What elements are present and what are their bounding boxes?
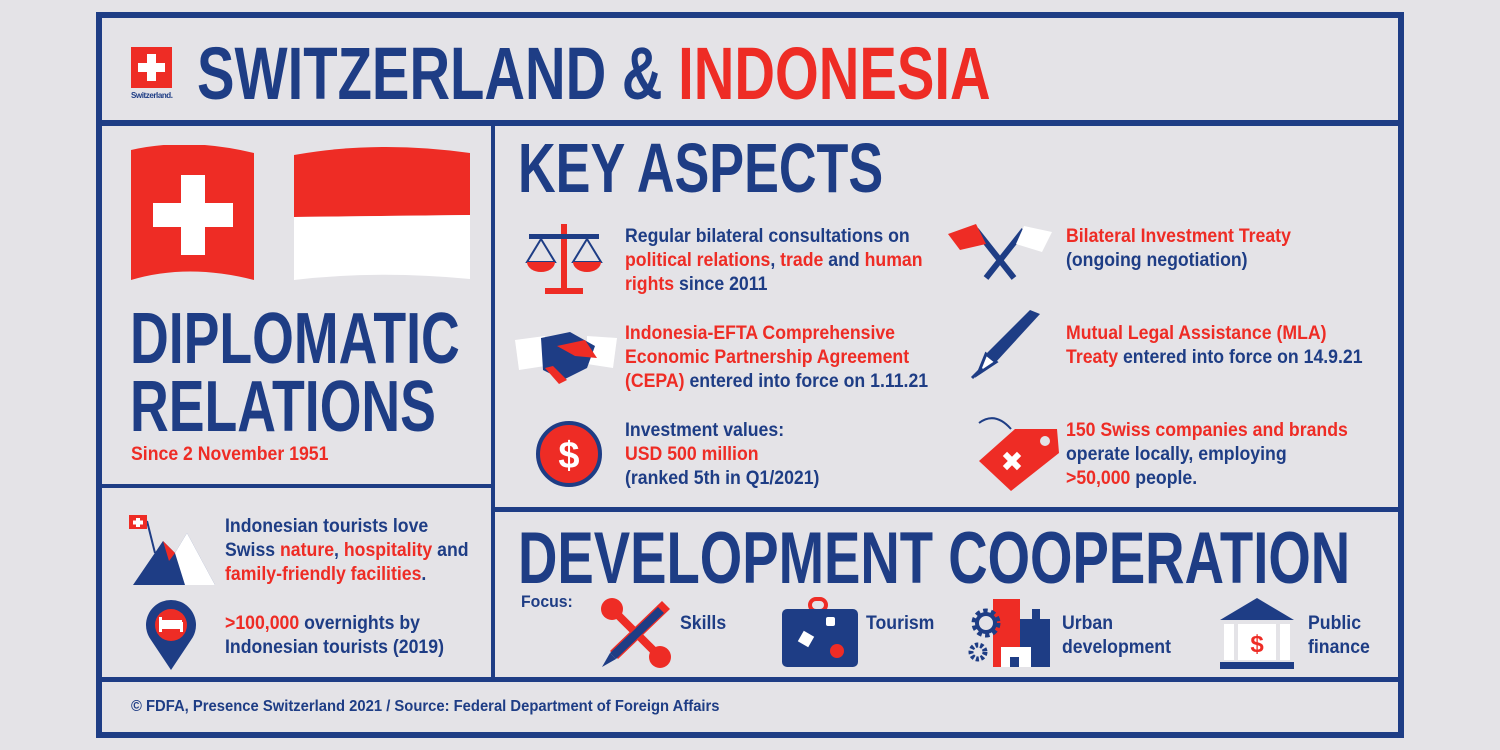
icon: price tag (978, 417, 1059, 491)
text: CEPA: Economic Partnership Agreement (625, 347, 909, 368)
text: companies (1066, 420, 1348, 489)
text: CEPA (625, 323, 928, 392)
text: MLA (1066, 323, 1363, 368)
heading: diplomatic relations (130, 299, 460, 447)
panel: tourism (129, 515, 215, 670)
text: CEPA: Indonesia-EFTA Comprehensive (625, 323, 895, 344)
text: consultations: rights since 2011 (625, 274, 767, 295)
icon: urban development (968, 599, 1050, 667)
icon: crossed flags (948, 224, 1052, 280)
panel: flags and diplomatic relations (131, 145, 470, 280)
text: skills: Skills (680, 613, 726, 634)
text: public finance: Public (1308, 613, 1361, 634)
heading: diplomatic relations: DIPLOMATIC (130, 299, 460, 379)
icon: flags (131, 145, 470, 280)
heading: key aspects: KEY ASPECTS (518, 129, 883, 207)
icon: bank: $ (1250, 631, 1264, 658)
text: tourists love: Swiss nature, hospitality and (225, 540, 469, 561)
text: investment: (ranked 5th in Q1/2021) (625, 468, 819, 489)
icon: handshake (515, 332, 617, 384)
text: consultations: political relations, trade and human (625, 250, 923, 271)
text: companies: >50,000 people. (1066, 468, 1197, 489)
icon: fountain pen (971, 310, 1040, 379)
text: companies: 150 Swiss companies and brands (1066, 420, 1348, 441)
icon: skills (601, 598, 671, 668)
logo: Switzerland (131, 47, 173, 99)
text: since: Since 2 November 1951 (131, 444, 328, 465)
text: investment: Investment values: (625, 420, 784, 441)
text: MLA: Treaty entered into force on 14.9.21 (1066, 347, 1363, 368)
text: overnights: >100,000 overnights by (225, 613, 420, 634)
text: investment: USD 500 million (625, 444, 759, 465)
text: tourists love: Indonesian tourists love (225, 516, 428, 537)
text: BIT (1066, 226, 1291, 271)
text: overnights (225, 613, 444, 658)
text: consultations (625, 226, 923, 295)
icon: dollar coin (536, 421, 602, 487)
heading: diplomatic relations: RELATIONS (130, 367, 436, 447)
text: tourism: Tourism (866, 613, 934, 634)
text: companies: operate locally, employing (1066, 444, 1287, 465)
icon: suitcase (782, 597, 858, 667)
text: investment (625, 420, 819, 489)
icon: scales (525, 224, 603, 294)
text: public finance (1308, 613, 1370, 658)
heading: development cooperation: DEVELOPMENT COOPERATION (518, 518, 1350, 599)
text: urban development: Urban (1062, 613, 1113, 634)
text: MLA: Mutual Legal Assistance (MLA) (1066, 323, 1327, 344)
icon: bank (1220, 598, 1294, 669)
text: BIT: Bilateral Investment Treaty (1066, 226, 1291, 247)
text: tourists love: family-friendly facilities. (225, 564, 426, 585)
icon: location pin with bed (146, 600, 196, 670)
title: SWITZERLAND & INDONESIA (197, 32, 991, 115)
icon: dollar coin: $ (558, 435, 580, 477)
text: urban development: development (1062, 637, 1171, 658)
text: urban development (1062, 613, 1171, 658)
footer: © FDFA, Presence Switzerland 2021 / Source: Federal Department of Foreign Affairs (131, 698, 720, 715)
text: tourists love (225, 516, 469, 585)
text: public finance: finance (1308, 637, 1370, 658)
text: BIT: (ongoing negotiation) (1066, 250, 1248, 271)
text: focus: Focus: (521, 592, 573, 611)
text: consultations: Regular bilateral consultations on (625, 226, 910, 247)
icon: mountain (129, 515, 215, 585)
text: CEPA: (CEPA) entered into force on 1.11.21 (625, 371, 928, 392)
text: overnights: Indonesian tourists (2019) (225, 637, 444, 658)
